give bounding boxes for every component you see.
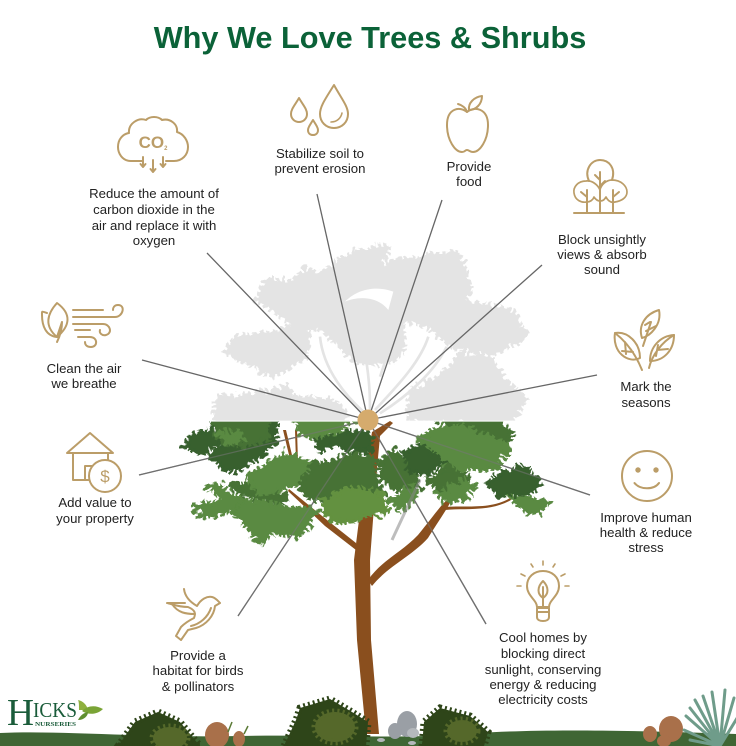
- label: health: health & reduce: [600, 525, 692, 540]
- grey stones: [377, 711, 419, 745]
- icon: house with coin: [67, 433, 121, 492]
- icon: CO2 cloud: [118, 117, 188, 172]
- label: cool homes: electricity costs: [498, 692, 588, 707]
- label: CO2: oxygen: [133, 233, 175, 248]
- logo: Hicks Nurseries: [7, 692, 103, 734]
- tree trunk and branches: [283, 421, 511, 734]
- label: food: food: [456, 174, 482, 189]
- icon: CO2 cloud: CO: [139, 133, 164, 152]
- label: CO2: carbon dioxide in the: [93, 202, 215, 217]
- label: cool homes: Cool homes by: [499, 630, 587, 645]
- icon: bird: [167, 589, 220, 640]
- label: property value: Add value to: [58, 495, 132, 510]
- title: Why We Love Trees & Shrubs: [154, 20, 586, 55]
- shrubs, rocks and ground plants: [118, 690, 736, 746]
- label: cool homes: blocking direct: [501, 646, 585, 661]
- icon: smiley: [622, 451, 672, 501]
- rocks right: [643, 716, 683, 746]
- radial connector lines: [139, 194, 597, 624]
- label: food: Provide: [447, 159, 491, 174]
- ground band: [0, 730, 736, 746]
- label: health: stress: [628, 540, 664, 555]
- logo: Hicks Nurseries: H: [7, 692, 34, 734]
- label: block views: views & absorb: [557, 247, 647, 262]
- label: health: Improve human: [600, 510, 692, 525]
- label: cool homes: energy & reducing: [489, 677, 597, 692]
- rocks left: [205, 722, 248, 746]
- label: habitat: & pollinators: [162, 679, 235, 694]
- icon: trees: [574, 160, 627, 213]
- label: property value: your property: [56, 511, 134, 526]
- label: cool homes: sunlight, conserving: [485, 662, 601, 677]
- icon: wind and leaf: [42, 303, 123, 347]
- label: clean air: Clean the air: [47, 361, 122, 376]
- icon: three leaves: [615, 310, 674, 370]
- grey tree silhouette: [217, 245, 527, 427]
- label: block views: Block unsightly: [558, 232, 646, 247]
- foliage: [183, 417, 547, 543]
- icon: CO2 cloud: 2: [164, 146, 168, 152]
- shrub right: [422, 708, 488, 746]
- icon: apple: [447, 96, 488, 152]
- shrub left: [118, 712, 200, 746]
- logo: Hicks Nurseries: ICKS: [33, 698, 77, 722]
- label: soil: prevent erosion: [275, 161, 365, 176]
- center hub: [358, 410, 378, 430]
- green tree: [139, 417, 590, 734]
- label: seasons: seasons: [621, 395, 671, 410]
- label: seasons: Mark the: [620, 379, 672, 394]
- label: habitat: Provide a: [170, 648, 227, 663]
- shrub center: [284, 699, 368, 746]
- label: CO2: Reduce the amount of: [89, 186, 219, 201]
- icon: light bulb: [517, 561, 569, 621]
- label: CO2: air and replace it with: [92, 218, 216, 233]
- label: clean air: we breathe: [50, 376, 117, 391]
- logo: Hicks Nurseries: NURSERIES: [35, 721, 76, 728]
- connector lines over foliage: [139, 420, 590, 624]
- yucca plant: [684, 690, 736, 746]
- icon: house with coin: $: [100, 467, 110, 486]
- label: soil: Stabilize soil to: [276, 146, 364, 161]
- icon: water drops: [291, 85, 348, 135]
- label: habitat: habitat for birds: [153, 663, 244, 678]
- label: block views: sound: [584, 262, 620, 277]
